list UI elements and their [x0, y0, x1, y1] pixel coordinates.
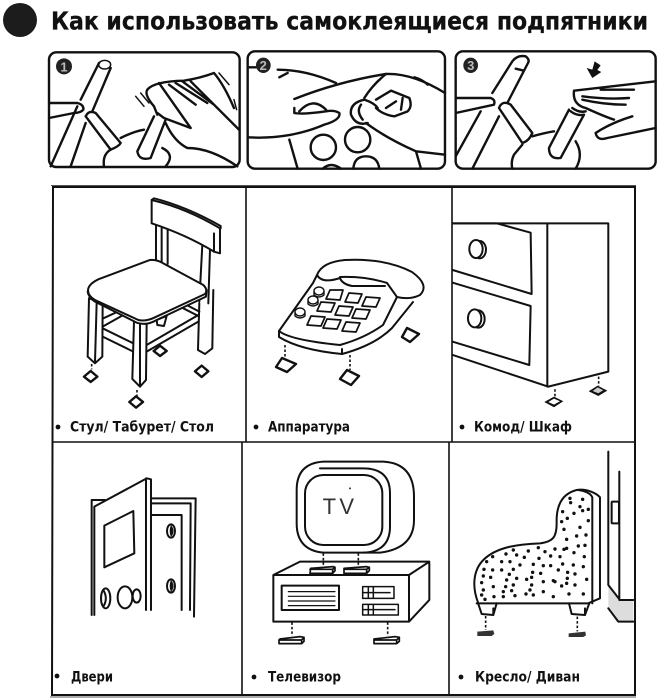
floor pads [544, 377, 607, 407]
armchair [474, 490, 600, 615]
wall and floor [608, 452, 633, 622]
door caption [55, 670, 113, 686]
dresser drawing [453, 223, 608, 387]
armchair caption: Кресло/ Диван [475, 670, 580, 686]
panel: telephone [276, 260, 424, 385]
floor pads [279, 553, 399, 644]
step marker 3 [463, 58, 478, 73]
TV label: TV [323, 494, 357, 519]
panel: door [92, 478, 196, 617]
chair drawing [88, 198, 221, 387]
number 1: 1 [60, 60, 68, 74]
number 2: 2 [260, 58, 267, 73]
floor pads [276, 328, 419, 385]
hand pressing pad [104, 73, 239, 166]
third leg with pad [549, 108, 586, 169]
telephone drawing [279, 260, 424, 354]
floor pads [84, 346, 208, 408]
TV base unit [273, 562, 429, 622]
arrow [587, 61, 601, 78]
panel: chair [84, 198, 221, 408]
floor pads [477, 616, 586, 637]
TV monitor [297, 462, 414, 553]
chair legs [456, 56, 554, 169]
dresser caption: Комод/ Шкаф [474, 420, 572, 436]
television caption: Телевизор [268, 670, 341, 686]
step marker 1 [56, 58, 72, 74]
usage grid frame [50, 186, 636, 697]
step marker 2 [256, 58, 271, 73]
chair legs [49, 60, 121, 166]
panel: armchair [474, 452, 633, 637]
hand [574, 81, 656, 139]
telephone caption: Аппаратура [268, 420, 350, 436]
chair caption: Стул/ Табурет/ Стол [70, 420, 214, 436]
sticker sheet [289, 127, 379, 169]
step 2 panel [248, 51, 445, 169]
step 1 panel [49, 52, 240, 167]
panel: dresser [453, 223, 608, 407]
door drawing [92, 478, 196, 617]
number 3: 3 [467, 58, 474, 73]
door caption: Двери [71, 670, 113, 686]
title bullet [3, 3, 37, 37]
step 3 panel [456, 51, 656, 169]
panel: television [273, 462, 429, 644]
hands and pad [248, 67, 445, 169]
